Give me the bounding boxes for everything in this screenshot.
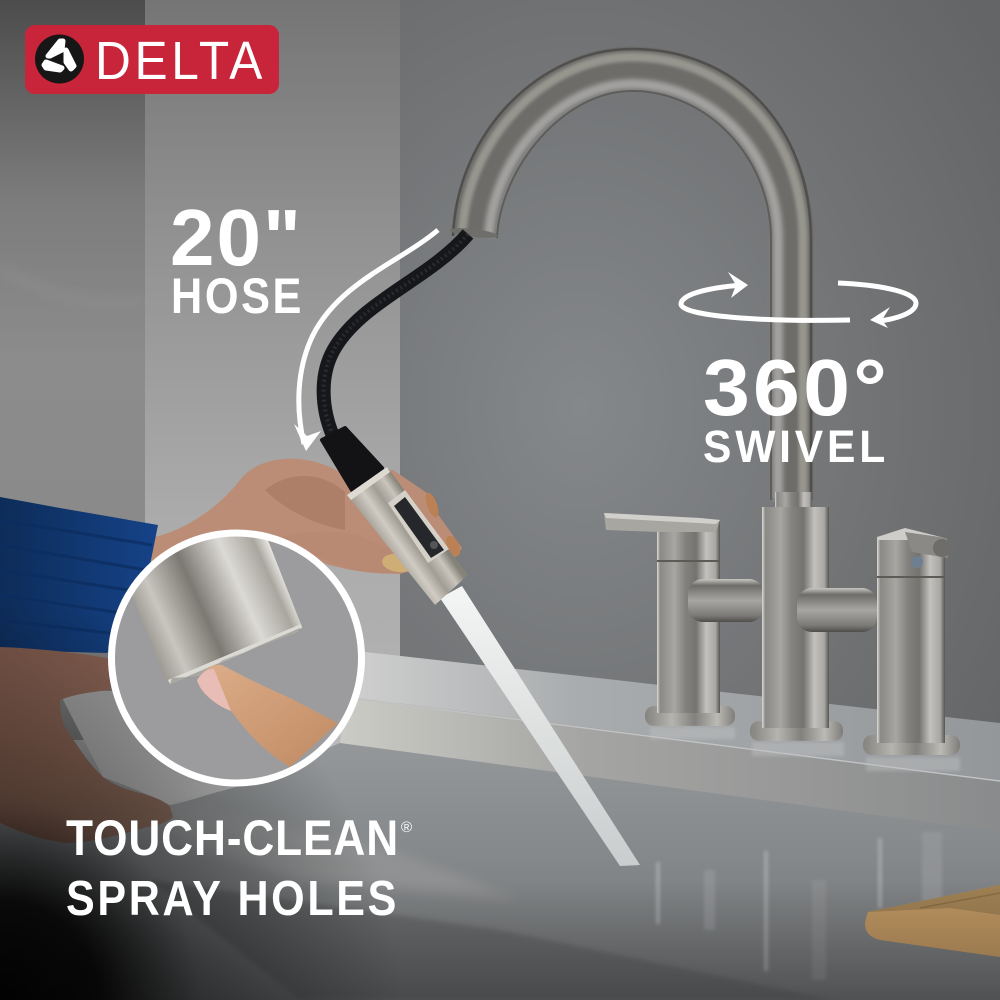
left handle (604, 513, 764, 726)
logo mark (35, 34, 84, 84)
wood cutting board (865, 885, 1000, 957)
arrow: 360 degree swivel (681, 272, 916, 328)
centre column (750, 507, 877, 741)
logo wordmark: DELTA (95, 31, 266, 91)
handle reflections (650, 727, 960, 771)
right handle (863, 528, 960, 755)
callout: 20 inch hose: HOSE (171, 268, 304, 324)
callout: 20 inch hose (170, 193, 304, 324)
left hand holding spray head (150, 459, 463, 575)
faucet spout (450, 49, 812, 508)
spray head (322, 428, 468, 605)
callout: 360 swivel: 360° (703, 343, 890, 432)
callout: touch-clean spray holes: TOUCH-CLEAN (66, 810, 399, 866)
background walls (0, 0, 1000, 800)
callout circle: touch-clean spray holes (112, 520, 362, 783)
callout: touch-clean spray holes (66, 810, 412, 926)
blue sleeve (0, 497, 158, 653)
faucet reflections on the counter (656, 832, 942, 980)
vignette (0, 600, 1000, 1000)
countertop and sink (0, 652, 1000, 1000)
callout: 360 swivel (703, 343, 890, 472)
callout: 360 swivel: SWIVEL (703, 421, 889, 472)
lower hand on sink (0, 647, 173, 843)
faucet body and handles (604, 507, 960, 755)
callout: 20 inch hose: 20" (170, 193, 303, 282)
pull-down hose (324, 234, 468, 436)
water stream (440, 586, 640, 866)
callout: touch-clean spray holes: ® (401, 819, 412, 836)
arrow: hose length (294, 230, 438, 451)
logo: Delta (25, 25, 279, 94)
callout: touch-clean spray holes: SPRAY HOLES (66, 872, 399, 926)
